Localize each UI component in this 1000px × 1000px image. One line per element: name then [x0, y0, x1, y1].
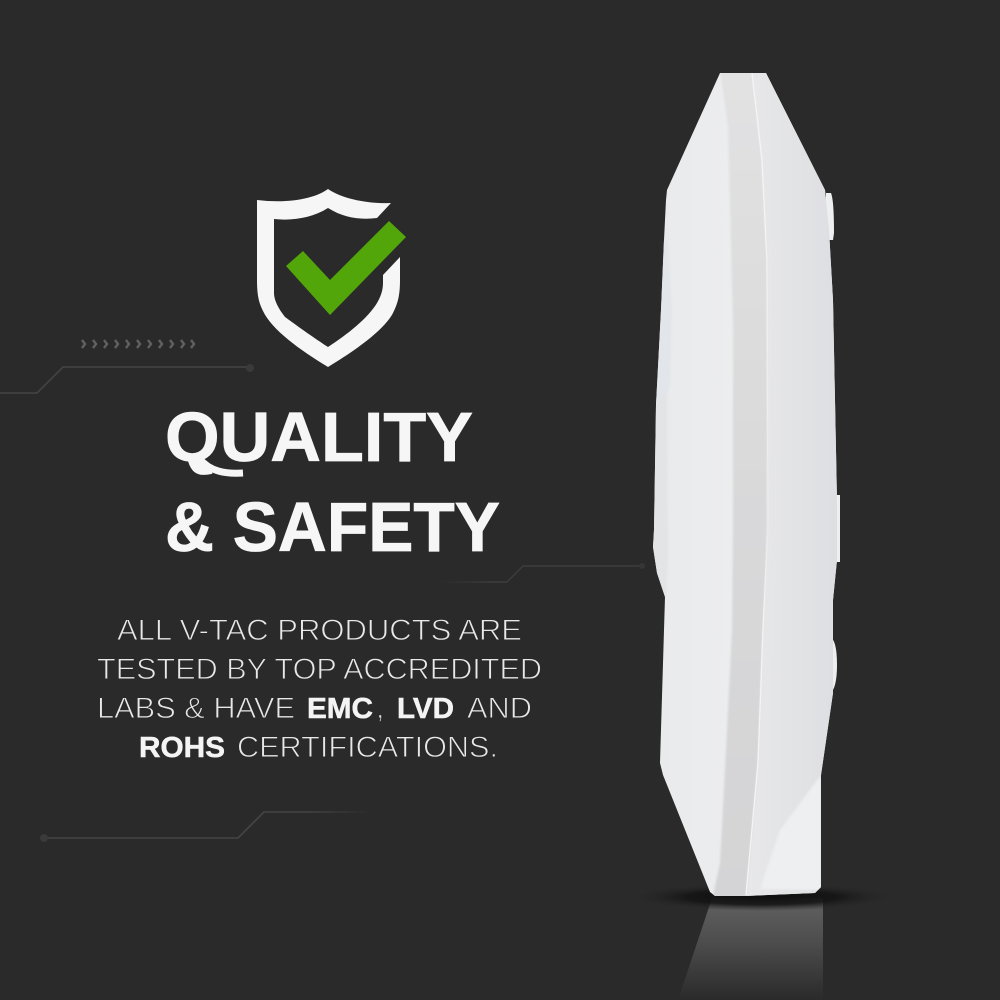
body text: TESTED BY TOP ACCREDITED: [97, 653, 542, 686]
lamp body: [653, 73, 837, 896]
circuit line: lower left: [40, 812, 373, 842]
shield outline: [257, 189, 400, 367]
light strip beside seam: [766, 411, 768, 559]
body text: LVD: [397, 693, 454, 725]
floor shadow: [627, 883, 897, 911]
body text: ALL V-TAC PRODUCTS ARE: [117, 614, 522, 647]
rear buttons: [826, 193, 840, 694]
centre grey band: [712, 70, 768, 900]
icon: shield with check mark: [257, 189, 406, 367]
body text: LABS & HAVE: [97, 692, 295, 725]
title: [165, 398, 500, 566]
chevron row: [82, 340, 194, 348]
front left lens edge: [656, 241, 664, 403]
inner shading: [651, 70, 845, 900]
title: & SAFETY: [165, 488, 500, 566]
front lower lens edge: [653, 400, 665, 597]
body text: ROHS: [139, 732, 225, 764]
mounting wedge highlight: [760, 775, 821, 890]
body text: AND: [467, 692, 532, 725]
body text: [97, 614, 542, 764]
title: QUALITY: [165, 398, 473, 476]
floor reflection: [678, 898, 823, 1000]
body text: EMC: [307, 693, 373, 725]
check mark: [286, 221, 406, 315]
circuit line: middle: [440, 563, 645, 582]
seam: [746, 73, 768, 895]
rear face: [746, 73, 837, 896]
body text: ,: [376, 692, 384, 725]
body text: CERTIFICATIONS.: [237, 731, 498, 764]
product: side view of white lamp: [651, 70, 845, 900]
circuit line: upper left: [0, 364, 254, 393]
